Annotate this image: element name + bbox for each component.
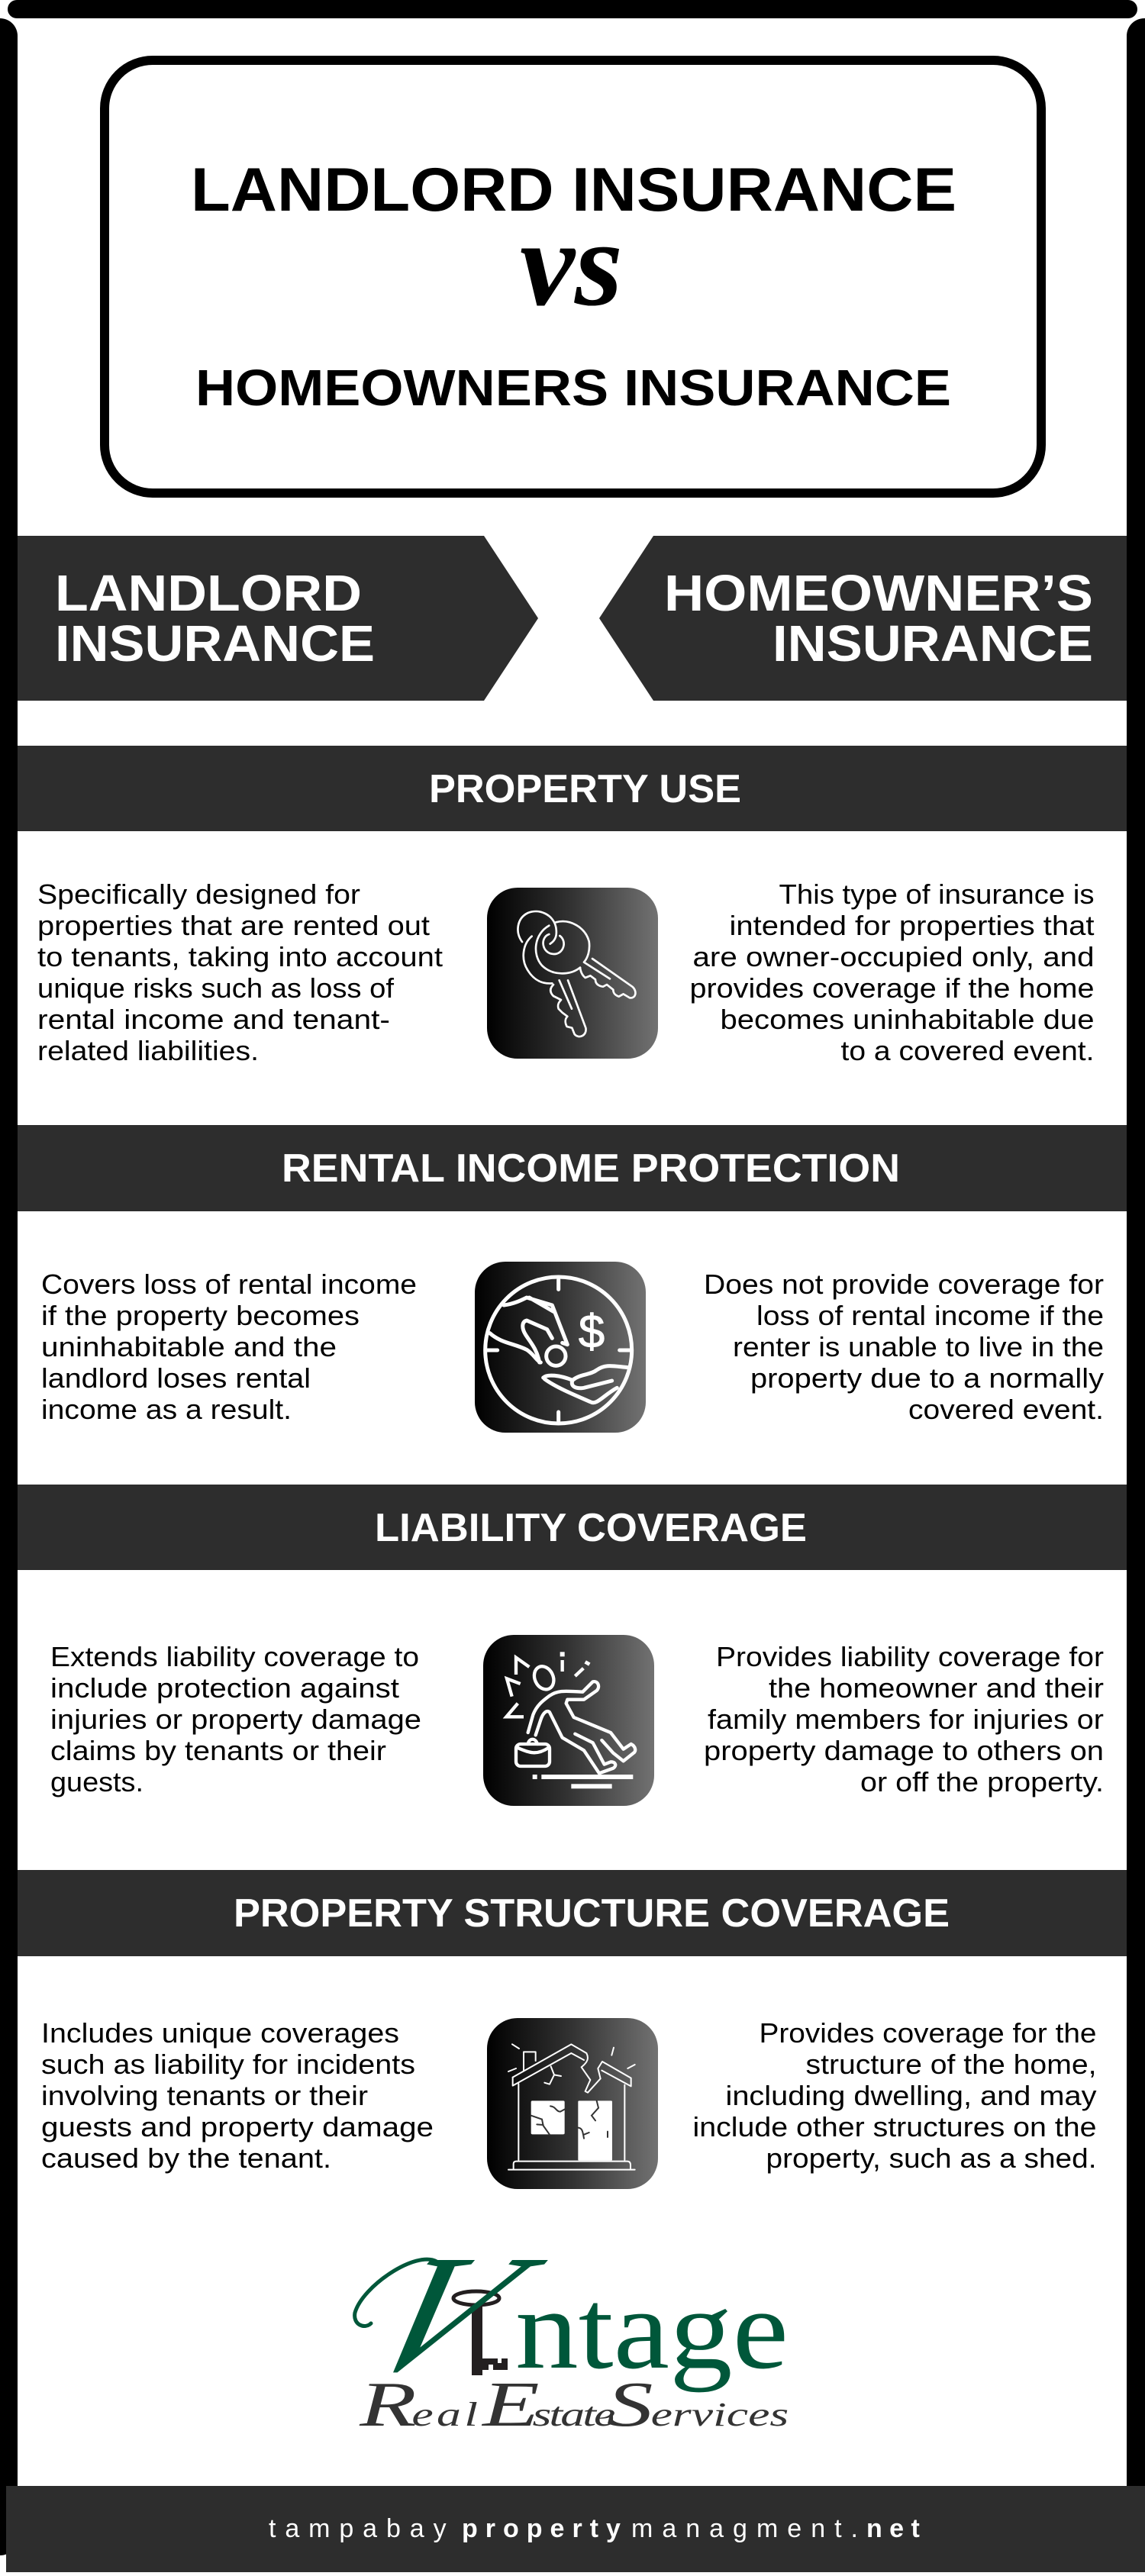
banner: homeowner's insurance: HOMEOWNER’S bbox=[664, 565, 1093, 622]
banner: landlord insurance bbox=[18, 536, 538, 701]
text: homeowner property use: becomes uninhabitable due bbox=[721, 1004, 1095, 1035]
heading: property use bbox=[18, 746, 1127, 831]
text: homeowner rental income: renter is unable to live in the bbox=[733, 1331, 1104, 1362]
text: landlord property use bbox=[37, 879, 443, 1066]
text: homeowner structure: property, such as a shed. bbox=[766, 2142, 1096, 2174]
heading: rental income protection bbox=[18, 1125, 1127, 1211]
text: homeowner structure bbox=[693, 2017, 1096, 2174]
text: landlord liability: claims by tenants or their bbox=[50, 1735, 386, 1766]
text: landlord property use: Specifically designed for bbox=[37, 879, 360, 910]
text: homeowner liability: the homeowner and their bbox=[769, 1672, 1104, 1704]
text: homeowner rental income bbox=[704, 1269, 1104, 1425]
text: landlord property use: rental income and tenant- bbox=[37, 1004, 390, 1035]
text: landlord liability: guests. bbox=[50, 1766, 144, 1797]
text: landlord structure: such as liability for incidents bbox=[41, 2049, 415, 2080]
text: homeowner liability: property damage to others on bbox=[704, 1735, 1104, 1766]
heading: property structure coverage: PROPERTY STRUCTURE COVERAGE bbox=[234, 1891, 950, 1936]
logo: vintage real estate services bbox=[305, 2221, 789, 2439]
panel: rental income protection bbox=[18, 1125, 1127, 1433]
text: homeowner structure: include other structures on the bbox=[693, 2111, 1096, 2142]
text: landlord rental income: landlord loses rental bbox=[41, 1362, 311, 1394]
text: homeowner rental income: covered event. bbox=[908, 1394, 1104, 1425]
text: homeowner liability: or off the property. bbox=[860, 1766, 1104, 1797]
logo tagline: E bbox=[481, 2368, 540, 2439]
banner: landlord insurance: INSURANCE bbox=[55, 615, 375, 672]
text: homeowner structure: including dwelling, and may bbox=[725, 2080, 1096, 2111]
text: homeowner structure: Provides coverage for the bbox=[759, 2017, 1096, 2049]
footer website: managment. bbox=[631, 2514, 867, 2543]
banner: homeowner's insurance bbox=[599, 536, 1127, 701]
text: landlord rental income: if the property becomes bbox=[41, 1300, 360, 1331]
text: homeowner liability: family members for injuries or bbox=[708, 1704, 1104, 1735]
text: homeowner rental income: property due to a normally bbox=[750, 1362, 1104, 1394]
banner: homeowner's insurance: INSURANCE bbox=[772, 615, 1093, 672]
logo key bbox=[453, 2291, 508, 2375]
heading: property structure coverage bbox=[18, 1870, 1127, 1956]
text: landlord property use: unique risks such as loss of bbox=[37, 972, 395, 1004]
footer website: net bbox=[866, 2514, 927, 2543]
text: landlord property use: related liabilities. bbox=[37, 1035, 259, 1066]
text: landlord liability bbox=[50, 1641, 421, 1797]
panel: liability coverage bbox=[18, 1485, 1127, 1806]
logo wordmark: ntage bbox=[515, 2266, 789, 2393]
text: landlord rental income: Covers loss of rental income bbox=[41, 1269, 417, 1300]
footer website: property bbox=[462, 2514, 628, 2543]
text: homeowner rental income: loss of rental income if the bbox=[756, 1300, 1104, 1331]
text: landlord property use: properties that are rented out bbox=[37, 910, 430, 941]
icon: person slipping bbox=[483, 1635, 654, 1806]
text: homeowner structure: structure of the home, bbox=[806, 2049, 1096, 2080]
vs script: vs bbox=[520, 196, 623, 332]
text: homeowner rental income: Does not provide coverage for bbox=[704, 1269, 1104, 1300]
title box bbox=[105, 60, 1041, 493]
logo wordmark: V bbox=[305, 2221, 582, 2407]
logo tagline: state bbox=[532, 2396, 623, 2433]
logo tagline: ervices bbox=[651, 2396, 789, 2433]
text: homeowner property use: provides coverage if the home bbox=[690, 972, 1095, 1004]
text: homeowner property use: intended for properties that bbox=[730, 910, 1095, 941]
logo tagline: R bbox=[359, 2368, 417, 2439]
panel: property structure coverage bbox=[18, 1870, 1127, 2189]
footer bar bbox=[6, 2486, 1145, 2572]
icon: coin and hands clock: $ bbox=[579, 1306, 605, 1359]
text: landlord liability: include protection against bbox=[50, 1672, 399, 1704]
text: homeowner property use bbox=[690, 879, 1095, 1066]
heading: rental income protection: RENTAL INCOME PROTECTION bbox=[282, 1146, 900, 1191]
icon: coin and hands clock bbox=[475, 1262, 646, 1433]
text: landlord structure bbox=[41, 2017, 434, 2174]
text: landlord structure: caused by the tenant. bbox=[41, 2142, 331, 2174]
title: homeowners insurance: HOMEOWNERS INSURANCE bbox=[195, 359, 951, 417]
text: homeowner property use: to a covered event. bbox=[841, 1035, 1095, 1066]
logo wordmark bbox=[305, 2221, 789, 2407]
footer website: tampabay bbox=[269, 2514, 456, 2543]
text: landlord structure: Includes unique coverages bbox=[41, 2017, 399, 2049]
text: homeowner property use: are owner-occupied only, and bbox=[693, 941, 1095, 972]
text: landlord rental income: income as a result. bbox=[41, 1394, 292, 1425]
text: landlord liability: injuries or property damage bbox=[50, 1704, 421, 1735]
text: landlord structure: involving tenants or their bbox=[41, 2080, 368, 2111]
text: homeowner property use: This type of insurance is bbox=[779, 879, 1095, 910]
heading: liability coverage: LIABILITY COVERAGE bbox=[375, 1506, 807, 1550]
heading: property use: PROPERTY USE bbox=[429, 767, 741, 811]
text: landlord rental income bbox=[41, 1269, 417, 1425]
text: homeowner liability bbox=[704, 1641, 1104, 1797]
text: landlord liability: Extends liability coverage to bbox=[50, 1641, 419, 1672]
banner: landlord insurance: LANDLORD bbox=[55, 565, 362, 622]
text: homeowner liability: Provides liability coverage for bbox=[716, 1641, 1104, 1672]
text: landlord rental income: uninhabitable and the bbox=[41, 1331, 337, 1362]
panel: property use bbox=[18, 746, 1127, 1066]
logo tagline: S bbox=[607, 2368, 653, 2439]
text: landlord property use: to tenants, taking into account bbox=[37, 941, 443, 972]
title: landlord insurance: LANDLORD INSURANCE bbox=[191, 156, 956, 224]
text: landlord structure: guests and property damage bbox=[41, 2111, 434, 2142]
icon: keys bbox=[487, 888, 658, 1059]
logo tagline: eal bbox=[411, 2396, 497, 2433]
icon: damaged house bbox=[487, 2018, 658, 2189]
heading: liability coverage bbox=[18, 1485, 1127, 1570]
